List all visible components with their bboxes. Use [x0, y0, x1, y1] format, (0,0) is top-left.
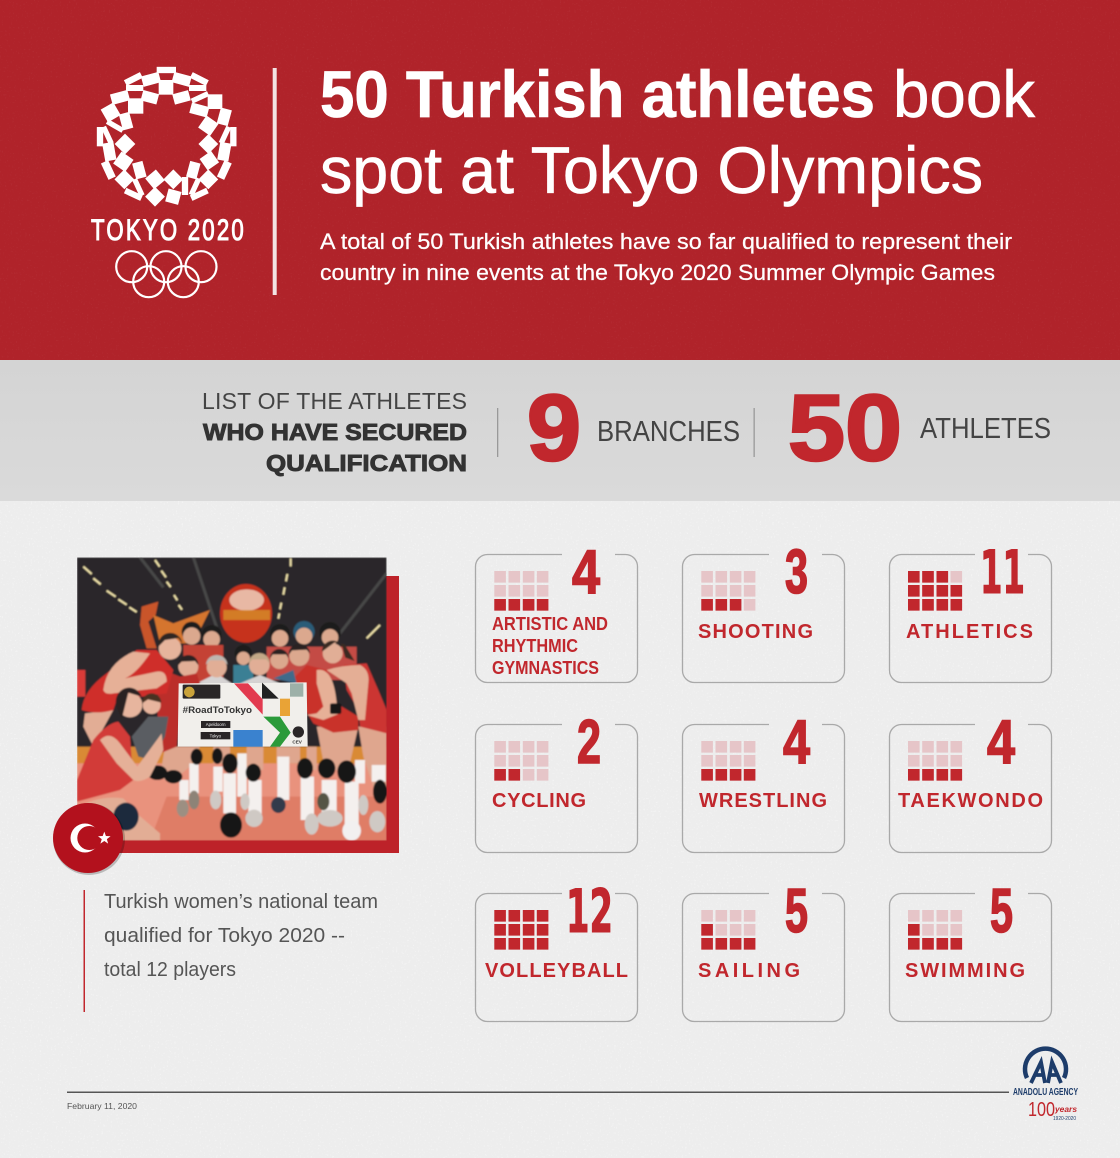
footer	[67, 1049, 1078, 1122]
band heading: LIST OF THE ATHLETES	[202, 388, 467, 414]
card: artistic and rhythmic gymnastics: 4	[572, 538, 600, 607]
photo caption	[84, 890, 378, 1012]
stat: branches	[527, 375, 740, 480]
ticket banner: #RoadToTokyo	[183, 705, 253, 715]
photo caption: qualified for Tokyo 2020 --	[104, 925, 345, 947]
card: artistic and rhythmic gymnastics: GYMNASTICS	[492, 658, 599, 678]
card: artistic and rhythmic gymnastics: RHYTHMIC	[492, 636, 578, 656]
card: swimming: 5	[990, 877, 1013, 946]
card: wrestling: WRESTLING	[699, 790, 827, 812]
card: artistic and rhythmic gymnastics: ARTISTIC AND	[492, 614, 608, 634]
card: volleyball: VOLLEYBALL	[485, 960, 628, 982]
title: book	[893, 57, 1036, 131]
card: swimming	[890, 877, 1052, 1022]
card: taekwondo: 4	[987, 708, 1015, 777]
card: shooting: 3	[785, 538, 808, 607]
photo caption: total 12 players	[104, 959, 236, 981]
card: cycling	[476, 708, 638, 852]
Anadolu Agency logo: 1920-2020	[1053, 1116, 1076, 1122]
card: shooting	[682, 538, 844, 682]
card: taekwondo: TAEKWONDO	[898, 790, 1043, 812]
icon: Olympic rings	[116, 251, 216, 297]
ticket banner: Tokyo	[210, 733, 222, 738]
card: athletics	[890, 538, 1052, 682]
front players: center	[157, 653, 297, 753]
card: volleyball: 12	[566, 877, 613, 947]
card: cycling: CYCLING	[492, 790, 586, 812]
card: sailing: SAILING	[698, 960, 800, 982]
photo caption: Turkish women’s national team	[104, 891, 378, 913]
band heading: QUALIFICATION	[266, 450, 467, 476]
card: artistic and rhythmic gymnastics	[476, 538, 638, 682]
stat: branches: BRANCHES	[597, 416, 740, 448]
band heading	[202, 388, 467, 476]
stat: athletes: 50	[788, 375, 902, 480]
card: wrestling	[682, 708, 844, 852]
logo wordmark: TOKYO 2020	[91, 213, 246, 247]
Anadolu Agency logo: ANADOLU AGENCY	[1013, 1087, 1078, 1098]
summary band	[0, 360, 1120, 501]
Anadolu Agency logo	[1013, 1049, 1078, 1122]
Anadolu Agency logo: years	[1054, 1104, 1077, 1114]
paper speckle texture	[0, 501, 1120, 1158]
card: athletics: 11	[980, 538, 1025, 608]
Anadolu Agency logo: 100	[1028, 1099, 1055, 1121]
subtitle: A total of 50 Turkish athletes have so far qualified to represent their	[320, 229, 1013, 254]
card: shooting: SHOOTING	[698, 621, 813, 643]
header panel	[0, 0, 1120, 360]
front players: left	[77, 633, 182, 841]
card: taekwondo	[890, 708, 1052, 852]
shoes	[177, 791, 385, 841]
ceiling lights	[83, 558, 380, 638]
title: spot at Tokyo Olympics	[320, 133, 983, 207]
icon: checkered emblem	[96, 66, 236, 206]
back row players	[182, 621, 341, 662]
daruma	[220, 584, 272, 643]
front players: right	[270, 641, 387, 733]
card: cycling: 2	[577, 708, 601, 777]
stat: branches: 9	[527, 375, 581, 480]
subtitle	[320, 229, 1013, 285]
photo: Turkish women's volleyball team	[77, 557, 387, 841]
card: sailing: 5	[785, 877, 808, 946]
band heading: WHO HAVE SECURED	[203, 419, 467, 445]
date: February 11, 2020	[67, 1101, 137, 1111]
photo panel	[53, 557, 399, 875]
header divider	[273, 68, 277, 295]
ticket banner	[178, 682, 308, 747]
card: sailing	[682, 877, 844, 1022]
photo red backing	[90, 576, 399, 853]
title: 50 Turkish athletes	[320, 57, 875, 131]
ticket banner: Apeldoorn	[206, 722, 226, 727]
icon: Turkish flag	[53, 803, 125, 875]
title	[320, 57, 1036, 207]
Tokyo 2020 logo	[91, 68, 246, 297]
floor	[77, 747, 387, 767]
stat: athletes: ATHLETES	[920, 413, 1051, 445]
stat: athletes	[788, 375, 1051, 480]
mascot	[140, 602, 158, 648]
card: swimming: SWIMMING	[905, 960, 1025, 982]
card: wrestling: 4	[783, 708, 810, 777]
card: volleyball	[476, 877, 638, 1022]
legs	[160, 727, 387, 787]
ticket banner: CEV	[292, 739, 303, 744]
card: athletics: ATHLETICS	[906, 621, 1033, 643]
subtitle: country in nine events at the Tokyo 2020 Summer Olympic Games	[320, 260, 995, 285]
